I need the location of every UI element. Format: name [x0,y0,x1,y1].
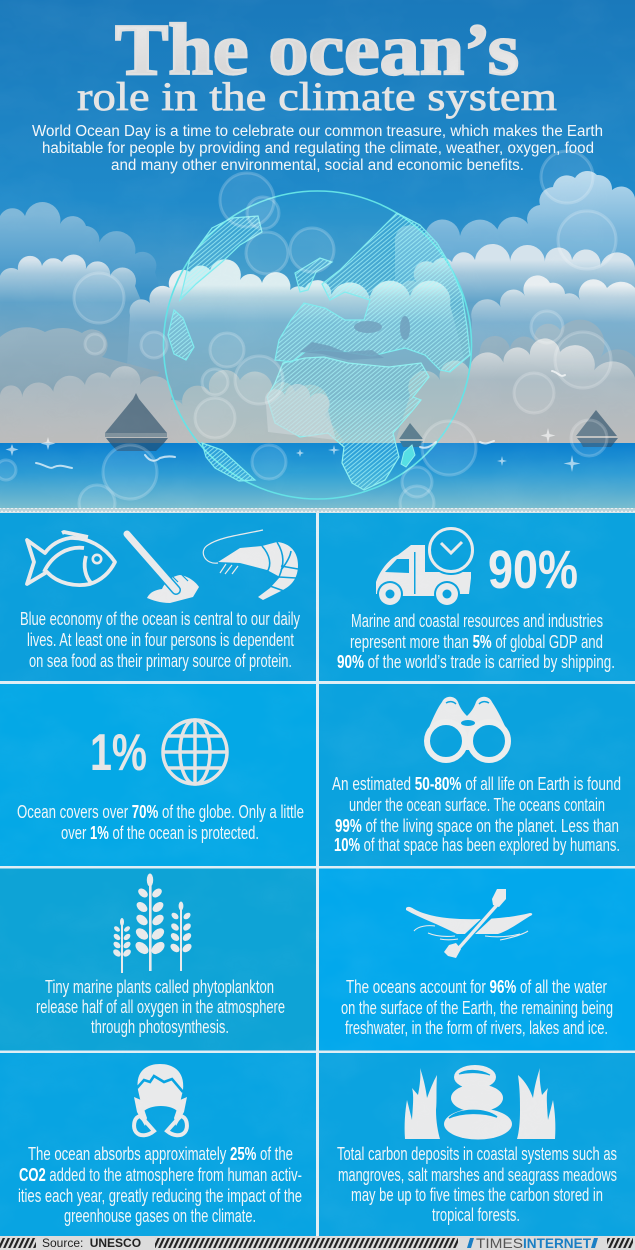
background: blue sky [0,0,635,443]
text: phytoplankton: release half of all oxygen in the atmosphere [36,997,285,1017]
text: blue economy: lives. At least one in four persons is dependent [27,630,294,650]
icon: canoe with paddle [406,889,532,958]
icon: shrimp [203,530,298,600]
text: life under the ocean [332,774,621,855]
intro text [32,123,603,174]
continent: Africa [267,357,429,490]
icon: globe [163,720,227,784]
icon: truck with clock [376,525,476,607]
text: trade and shipping: represent more than 5% of global GDP and [350,632,603,652]
icon: sushi and chopstick [127,534,199,603]
continent: Greenland and North America [180,216,262,300]
stat: 90%: 90% [488,540,578,600]
text: phytoplankton [36,977,285,1037]
inland seas [300,316,410,360]
icon: marine plants [112,874,193,973]
icon: sailboat left [105,393,168,451]
text: carbon deposits: tropical forests. [432,1205,520,1225]
panel: phytoplankton [0,868,316,1050]
text: blue economy [20,609,300,671]
logo: Times Internet [467,1235,598,1250]
source credit: Source: UNESCO [42,1236,141,1250]
continent: Europe and Asia [275,213,470,372]
text: carbon dioxide absorption: CO2 added to the atmosphere from human activ- [19,1165,302,1185]
subtitle: role in the climate system [77,74,557,119]
intro text: and many other environmental, social and economic benefits. [111,157,524,174]
title [77,9,557,119]
intro text: habitable for people by providing and regulating the climate, weather, oxygen, food [42,140,594,157]
panel: water on Earth [319,868,635,1050]
bubbles [0,151,616,521]
footer [0,1235,635,1250]
panel: carbon dioxide absorption [0,1053,316,1236]
text: phytoplankton: Tiny marine plants called phytoplankton [45,977,274,997]
text: blue economy: on sea food as their primary source of protein. [29,651,292,671]
text: carbon deposits [337,1144,617,1225]
clouds overlapping globe [265,384,336,440]
intro text: World Ocean Day is a time to celebrate our common treasure, which makes the Earth [32,123,603,140]
icon: stones and grass [405,1065,555,1140]
panel: trade and shipping [319,513,635,681]
icon: fish [27,532,115,585]
title: The ocean’s [115,9,519,90]
text: ocean coverage: over 1% of the ocean is protected. [61,823,259,843]
text: blue economy: Blue economy of the ocean is central to our daily [20,609,300,629]
stat: 1%: 1% [90,724,147,782]
text: ocean coverage [17,802,304,843]
panel: blue economy [0,513,316,681]
wave border [0,508,635,513]
text: carbon dioxide absorption: ities each year, greatly reducing the impact of the [18,1186,302,1206]
text: water on Earth: The oceans account for 96% of all the water [346,977,607,997]
panel: ocean coverage [0,684,316,866]
continent: South America [168,310,255,481]
text: ocean coverage: Ocean covers over 70% of the globe. Only a little [17,802,304,822]
panel: life under the ocean [319,684,635,866]
panel: carbon deposits [319,1053,635,1236]
continent: Scandinavia [295,258,332,292]
text: water on Earth [341,977,613,1038]
text: carbon dioxide absorption: greenhouse gases on the climate. [64,1206,256,1226]
text: phytoplankton: through photosynthesis. [91,1017,229,1037]
icon: binoculars [425,697,510,760]
sea [0,443,635,508]
icon: gas mask [134,1064,187,1135]
panel dividers [0,513,635,1236]
icon: sailboat right [576,410,618,447]
continent: Madagascar [401,445,415,467]
text: carbon dioxide absorption: The ocean absorbs approximately 25% of the [28,1144,293,1164]
text: trade and shipping [337,611,615,672]
globe [164,191,472,499]
icon: sailboat centre [399,423,423,447]
stars and seagulls [6,371,580,472]
clouds [0,171,635,443]
text: carbon dioxide absorption [18,1144,302,1226]
